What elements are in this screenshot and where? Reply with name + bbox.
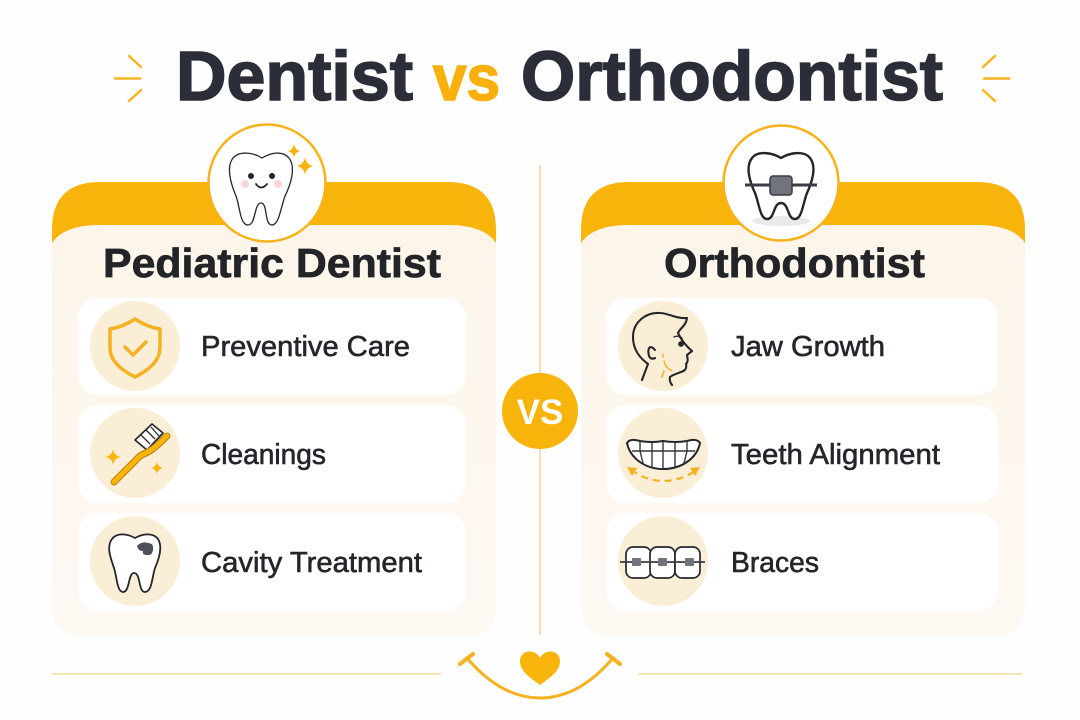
label: Jaw Growth [731,331,885,363]
label: Cavity Treatment [201,547,422,579]
panel heading: Orthodontist [664,240,925,286]
label: Braces [731,547,819,579]
panel body [581,225,1025,636]
center divider line [539,165,541,635]
panel header band [581,182,1025,245]
panel heading: Pediatric Dentist [103,240,441,286]
VS badge [502,373,578,449]
footer rule right [638,673,1022,675]
title: Orthodontist [521,37,943,115]
icon: braces on three teeth [620,547,705,578]
badge: tooth with bracket [724,126,838,240]
label: Teeth Alignment [731,439,940,471]
row: cavity treatment [78,513,466,611]
row: preventive care [78,298,466,395]
row: jaw growth [606,298,998,395]
label: Preventive Care [201,331,410,363]
panel: orthodontist [581,126,1025,636]
row: cleanings [78,405,466,503]
icon: smile with heart [460,652,620,698]
VS badge: VS [517,393,563,432]
title: vs [433,42,500,114]
panel: pediatric dentist [52,124,496,636]
icon: right title rays [983,56,1009,101]
panel body [52,225,496,636]
row: braces [606,513,998,611]
icon: shield with check [110,319,160,377]
title [176,37,943,115]
title: Dentist [176,37,413,115]
icon: left title rays [115,56,141,101]
badge: smiling tooth [208,124,326,242]
footer rule left [52,673,441,675]
icon: toothbrush with sparkles [105,424,167,482]
panel header band [52,182,496,245]
label: Cleanings [201,439,326,471]
row: teeth alignment [606,405,998,503]
icon: smile with alignment arrows [627,440,700,481]
icon: head profile [633,313,692,385]
icon: tooth with cavity [109,534,160,592]
